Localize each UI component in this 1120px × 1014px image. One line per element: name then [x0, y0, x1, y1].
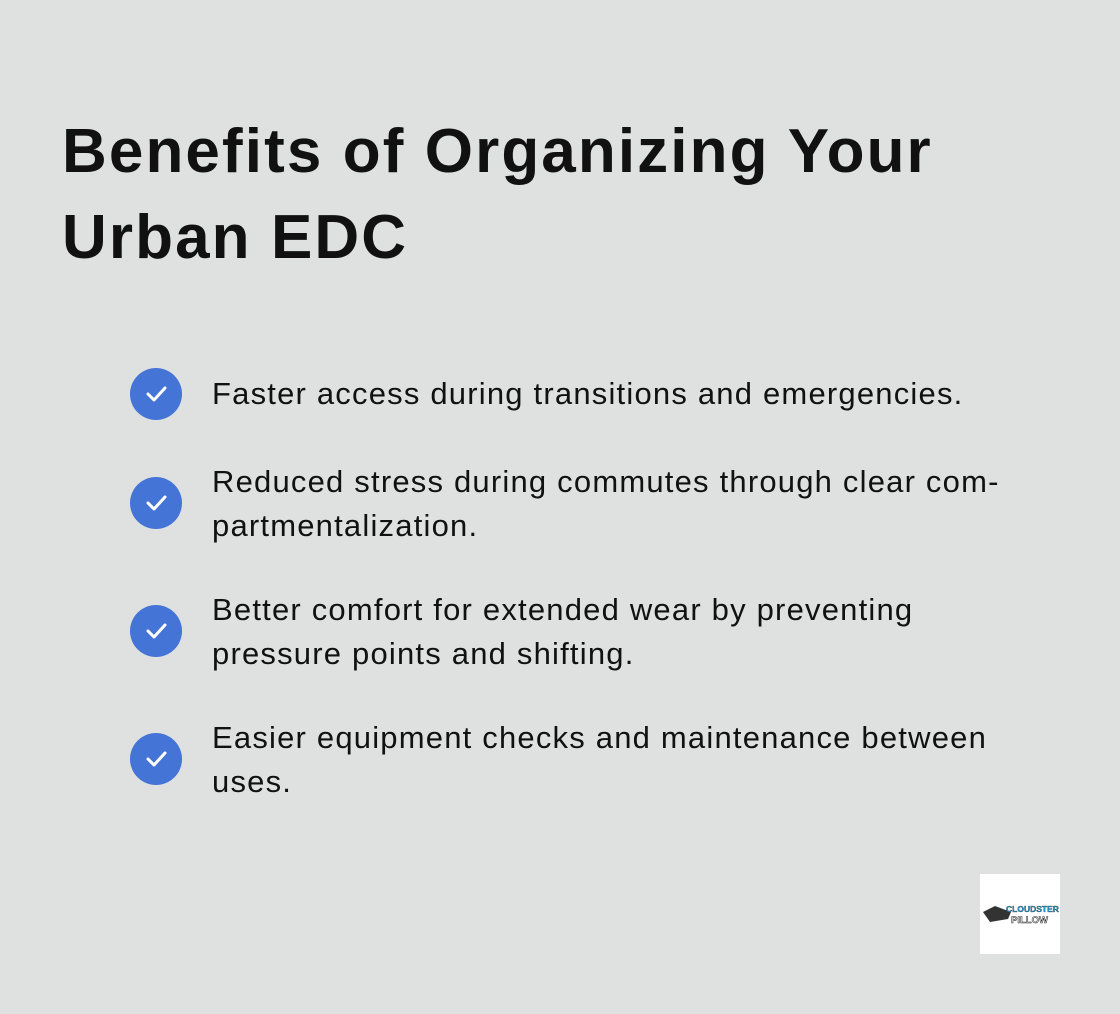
- text 2: [212, 464, 1000, 543]
- logo: [980, 874, 1060, 954]
- item 4: [130, 720, 987, 799]
- text 4: Easier equipment checks and maintenance between: [212, 720, 987, 755]
- icon: check 1: [130, 368, 182, 420]
- text 4: uses.: [212, 764, 292, 799]
- text 1: Faster access during transitions and emergencies.: [212, 376, 963, 411]
- logo: PILLOW: [1011, 915, 1048, 926]
- text 4: [212, 720, 987, 799]
- icon: check 3: [130, 605, 182, 657]
- icon: check 4: [130, 733, 182, 785]
- logo: CLOUDSTER: [1006, 904, 1059, 914]
- title: Benefits of Organizing Your: [62, 117, 933, 186]
- item 2: [130, 464, 1000, 543]
- text 3: pressure points and shifting.: [212, 636, 635, 671]
- text 3: Better comfort for extended wear by preventing: [212, 592, 913, 627]
- text 2: partmentalization.: [212, 508, 478, 543]
- item 3: [130, 592, 913, 671]
- title: [62, 117, 933, 272]
- item 1: [130, 368, 963, 420]
- title: Urban EDC: [62, 203, 408, 272]
- text 2: Reduced stress during commutes through clear com-: [212, 464, 1000, 499]
- icon: check 2: [130, 477, 182, 529]
- text 3: [212, 592, 913, 671]
